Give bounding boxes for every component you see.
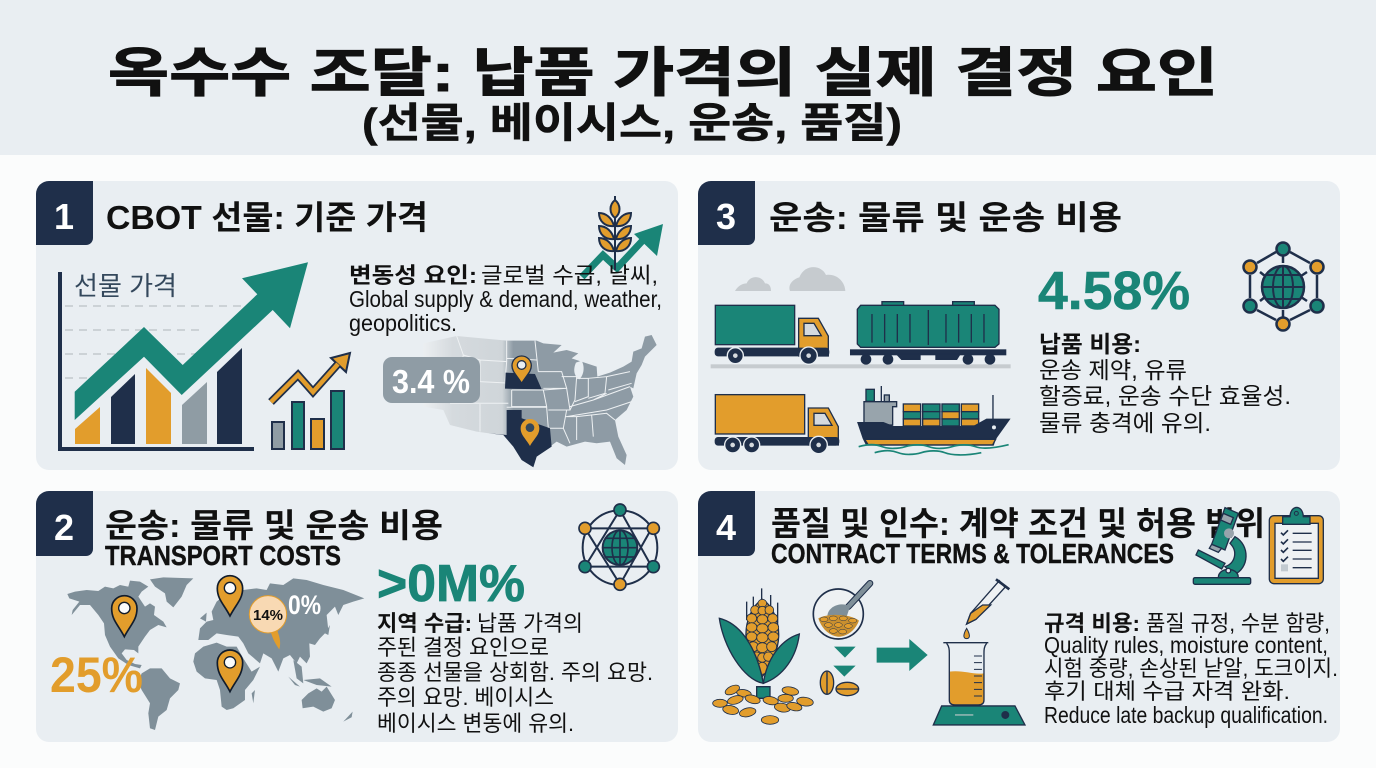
header band [0, 0, 1376, 155]
specification cost text: 규격 비용: [1044, 611, 1140, 636]
magnified sample scoop [813, 583, 870, 639]
illustration: corn, sampling and lab test [713, 579, 1025, 725]
regional supply text: 납품 가격의 [477, 611, 583, 636]
badge 3 [698, 181, 755, 245]
beaker on stand [933, 643, 1025, 725]
heading 1: CBOT 선물: 기준 가격 [106, 199, 428, 236]
delivery cost text: 운송 제약, 유류 [1039, 357, 1187, 383]
specification cost text: Quality rules, moisture content, [1044, 632, 1328, 658]
callout: 3.4 %: 3.4 % [392, 363, 470, 400]
panel 4: quality [698, 491, 1340, 742]
regional supply text: 주된 결정 요인으로 [377, 635, 549, 660]
badge 1: 1 [54, 196, 74, 237]
badge 4 [698, 491, 755, 556]
badge 3: 3 [716, 196, 736, 237]
regional supply text: 지역 수급: [377, 611, 472, 636]
pipette [964, 579, 1009, 639]
delivery cost text: 납품 비용: [1039, 331, 1141, 357]
badge 2: 2 [54, 507, 74, 548]
stat: >0M%: >0M% [377, 555, 525, 613]
subtitle: (선물, 베이시스, 운송, 품질) [362, 100, 902, 146]
heading 2: 운송: 물류 및 운송 비용 [105, 507, 443, 544]
icon: wheat and rising arrow [582, 196, 663, 277]
regional supply text: 주의 요망. 베이시스 [377, 685, 554, 710]
icon: globe star network [579, 504, 659, 590]
icon: globe network [1244, 242, 1324, 330]
heading 2: TRANSPORT COSTS [105, 540, 341, 571]
corn plant [713, 588, 814, 724]
transport vehicles illustration [711, 267, 1011, 455]
futures price chart [60, 262, 308, 449]
regional supply text: 베이시스 변동에 유의. [377, 711, 574, 736]
label: 0%: 0% [288, 590, 321, 620]
title: 옥수수 조달: 납품 가격의 실제 결정 요인 [108, 44, 1218, 103]
heading 4: 품질 및 인수: 계약 조건 및 허용 범위 [771, 505, 1265, 542]
volatility text: 글로벌 수급, 날씨, [481, 263, 658, 288]
regional supply text [377, 611, 653, 736]
specification cost text [1044, 611, 1338, 728]
stat: 25%: 25% [50, 647, 143, 703]
heading 4: CONTRACT TERMS & TOLERANCES [771, 538, 1174, 569]
volatility text: Global supply & demand, weather, [349, 286, 662, 312]
specification cost text: 품질 규정, 수분 함량, [1146, 611, 1330, 636]
icon: microscope [1193, 508, 1251, 584]
regional supply text: 종종 선물을 상회함. 주의 요망. [377, 660, 653, 685]
heading 2 [105, 507, 443, 571]
callout: 3.4 % [383, 357, 480, 403]
delivery cost text: 할증료, 운송 수단 효율성. [1039, 383, 1291, 409]
icon: clipboard checklist [1269, 507, 1323, 584]
label: 14%: 14% [253, 607, 283, 624]
badge 2 [36, 491, 93, 556]
panel 3: transport [698, 181, 1340, 470]
panel 1: CBOT futures [36, 181, 678, 470]
callout bubble: 14% [249, 596, 287, 649]
mini bar chart icon [271, 353, 350, 449]
volatility text: 변동성 요인: [349, 263, 477, 288]
specification cost text: Reduce late backup qualification. [1044, 702, 1328, 728]
specification cost text: 시험 중량, 손상된 낟알, 도크이지. [1044, 656, 1338, 681]
heading 3: 운송: 물류 및 운송 비용 [769, 199, 1122, 236]
delivery cost text [1039, 331, 1291, 436]
badge 1 [36, 181, 93, 245]
volatility text: geopolitics. [349, 310, 457, 336]
panel 2: basis [36, 491, 678, 742]
badge 4: 4 [716, 507, 736, 548]
delivery cost text: 물류 충격에 유의. [1039, 410, 1211, 436]
arrow [877, 639, 928, 671]
US map [423, 335, 657, 467]
specification cost text: 후기 대체 수급 자격 완화. [1044, 679, 1290, 704]
heading 4 [771, 505, 1265, 569]
world map [67, 576, 364, 730]
volatility text [349, 263, 662, 336]
stat: 4.58%: 4.58% [1038, 261, 1190, 321]
chart label: 선물 가격 [74, 271, 177, 301]
